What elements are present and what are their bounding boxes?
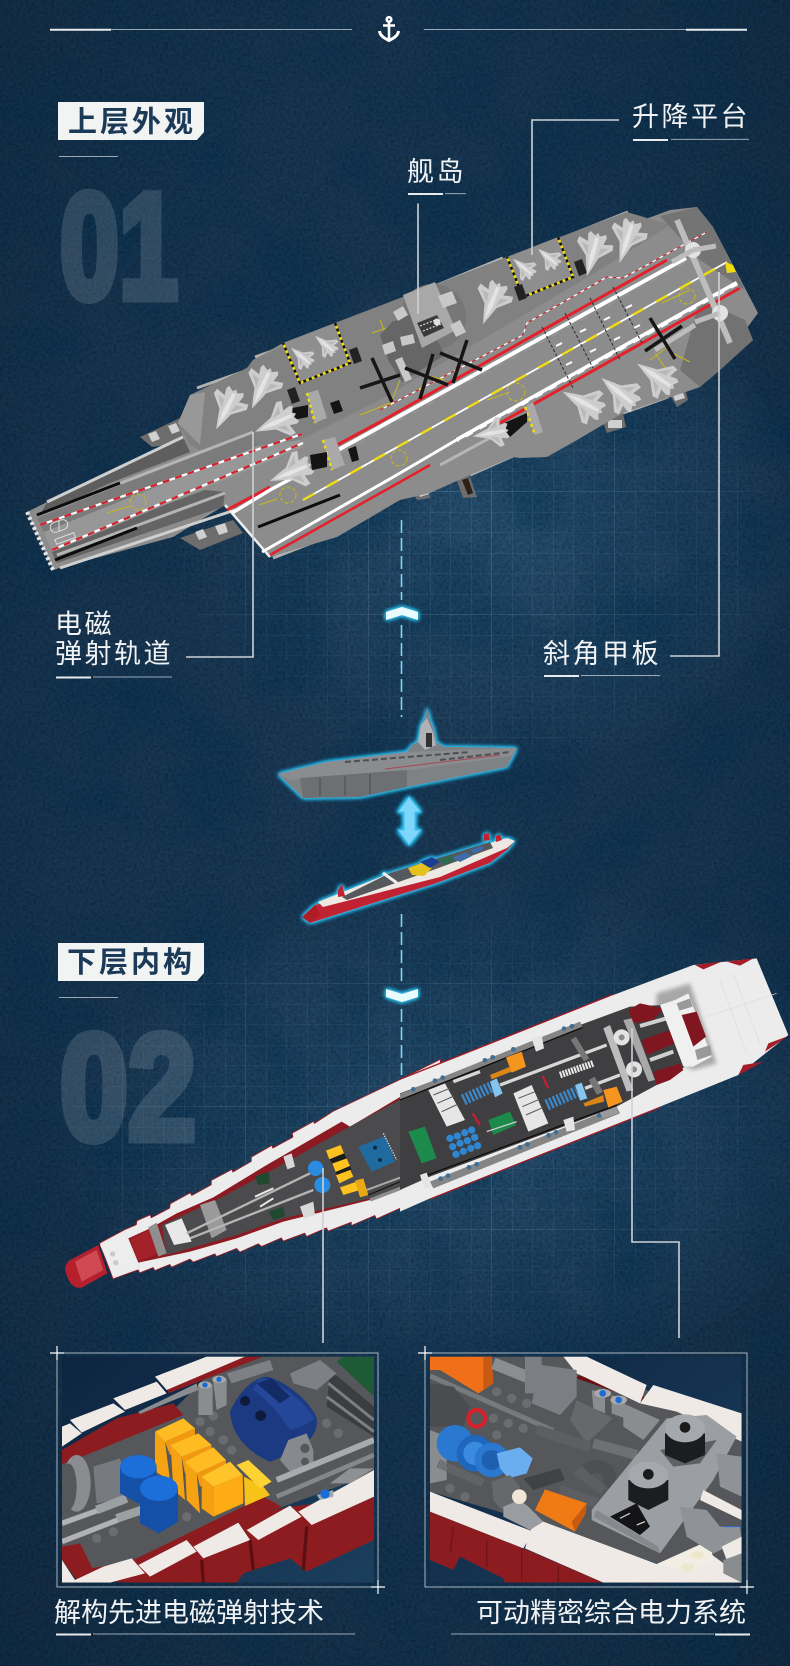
blue barrels <box>120 1467 157 1503</box>
section 1 badge: 上层外观: 上层外观 <box>68 106 196 138</box>
section 2 badge: 下层内构: 下层内构 <box>67 946 195 979</box>
bow tip yellow light <box>725 262 736 273</box>
inner red wall <box>128 1073 440 1263</box>
top divider with anchor <box>50 17 747 40</box>
green plate and vents <box>337 1357 374 1397</box>
leader: 可动精密综合电力系统 <box>632 1028 679 1338</box>
peg pairs <box>411 1024 602 1181</box>
inner deck <box>162 1078 440 1255</box>
engine bay floor <box>400 1005 685 1190</box>
pillars and fittings <box>198 1378 227 1415</box>
section 1 badge rule <box>59 156 118 158</box>
stern block <box>660 993 712 1067</box>
machinery white blocks <box>428 1083 548 1132</box>
bow hull number marking <box>49 518 75 544</box>
grey studs <box>92 1411 343 1543</box>
hull deck <box>27 207 758 570</box>
yellow blocks <box>326 1145 368 1197</box>
leader: 解构先进电磁弹射技术 <box>322 1168 324 1343</box>
panel: electromagnetic catapult detail <box>50 1346 385 1594</box>
leader: 斜角甲板 <box>670 272 719 656</box>
label: 电磁弹射轨道 <box>55 610 173 678</box>
catapult blast shields <box>292 390 543 470</box>
grey studs <box>445 1387 531 1501</box>
island superstructure <box>380 282 466 382</box>
nose cap <box>65 1245 107 1288</box>
big number 01: 01 <box>60 162 178 330</box>
frame and corner marks <box>50 1346 385 1594</box>
blue gears <box>437 1425 473 1462</box>
bottom machinery <box>492 1475 520 1510</box>
folded-rotor helicopters <box>360 318 682 402</box>
elevator platforms <box>283 237 587 404</box>
hull bow half <box>65 1060 440 1288</box>
rods <box>430 1376 553 1431</box>
blue cylinder group <box>446 1126 481 1158</box>
section 2 badge rule <box>59 996 118 998</box>
blue block <box>358 1136 395 1172</box>
blue discs <box>308 1161 323 1176</box>
bow ramps <box>27 432 340 570</box>
shaded stern and island side <box>178 207 753 470</box>
mini lower hull ship <box>302 833 515 923</box>
leader: 电磁弹射轨道 <box>186 432 253 657</box>
AEW planes on stern <box>655 220 730 350</box>
orange gearboxes <box>506 1052 623 1108</box>
caption: 可动精密综合电力系统: 可动精密综合电力系统 <box>476 1598 746 1628</box>
green module <box>488 1112 516 1135</box>
orange gearbox top <box>430 1357 493 1393</box>
caption: 解构先进电磁弹射技术: 解构先进电磁弹射技术 <box>54 1598 324 1628</box>
flight deck stripes <box>107 232 740 555</box>
dashed centre connector <box>400 520 402 1075</box>
coil and hoses <box>66 1455 91 1512</box>
drive shafts <box>453 1045 620 1088</box>
grey brackets <box>525 1357 577 1415</box>
big number 02: 02 <box>60 1003 196 1171</box>
upper deck carrier model <box>27 207 758 570</box>
label: 电磁弹射轨道: 电磁 <box>55 610 114 640</box>
tubes <box>277 1440 374 1480</box>
left machinery <box>430 1383 470 1427</box>
twin rudder frame <box>628 1003 683 1085</box>
double arrow <box>398 797 421 845</box>
label: 升降平台: 升降平台 <box>632 102 750 132</box>
orange capacitor blocks <box>155 1432 170 1480</box>
leader: 舰岛 <box>417 204 419 314</box>
icon: anchor <box>380 17 398 40</box>
label: 舰岛: 舰岛 <box>407 157 466 187</box>
right pillars <box>680 1453 742 1553</box>
panel: integrated power system detail <box>418 1346 754 1594</box>
chevron bottom <box>386 989 418 1002</box>
chevron top <box>386 607 418 620</box>
label: 电磁弹射轨道: 弹射轨道 <box>55 639 173 669</box>
blue gear stacks <box>463 1087 577 1105</box>
lower hull interior model <box>65 958 788 1288</box>
parked jets <box>200 215 685 498</box>
label: 斜角甲板: 斜角甲板 <box>543 639 661 669</box>
leader: 升降平台 <box>532 120 619 255</box>
light grey bearing bracket <box>592 1415 737 1553</box>
navy drum <box>230 1377 317 1462</box>
red clamps <box>473 1076 548 1125</box>
photo: power system cut-away <box>430 1357 742 1583</box>
sponsons and rails <box>140 212 688 558</box>
mini assembled ship <box>278 707 517 798</box>
tube cluster <box>538 1425 588 1443</box>
hull stern half <box>400 958 788 1212</box>
photo: catapult cut-away <box>60 1357 374 1583</box>
frame and corner marks <box>418 1346 754 1594</box>
